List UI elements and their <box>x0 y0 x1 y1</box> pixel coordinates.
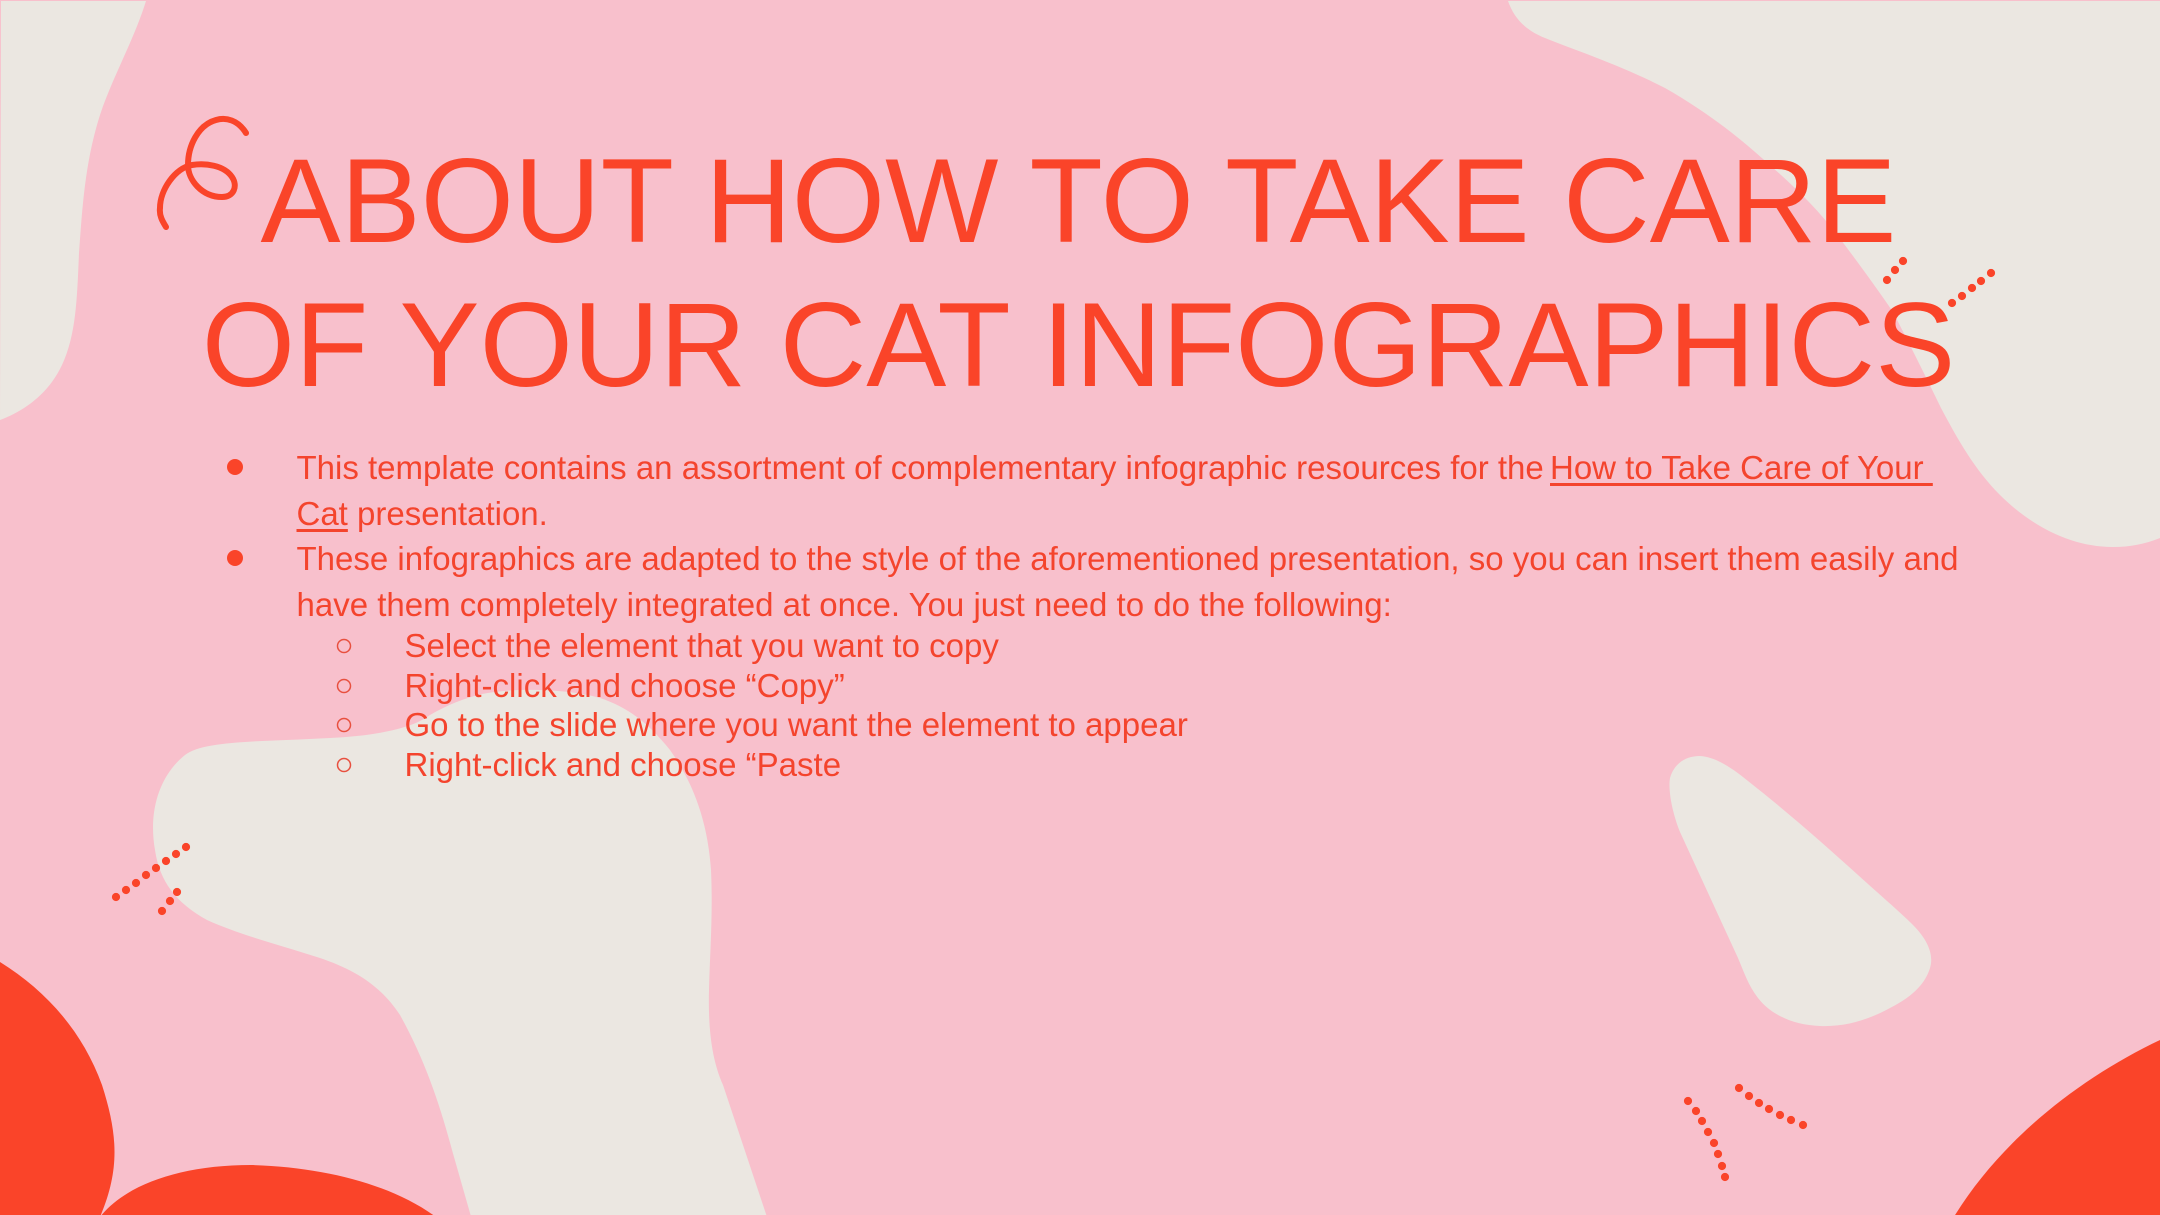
bullet list text: have them completely integrated at once. You just need to do the following: <box>296 586 1392 622</box>
blob: red bottom right <box>1952 1040 2160 1215</box>
blob: centre left bone shape <box>153 690 768 1215</box>
blob: red bottom left <box>0 962 440 1215</box>
title: ABOUT HOW TO TAKE CARE <box>261 134 1896 268</box>
dots: top right <box>1883 257 1995 307</box>
bullet list text: This template contains an assortment of complementary infographic resources for the <box>296 448 1544 486</box>
icon: curly squiggle <box>160 119 246 227</box>
bullet list text: Select the element that you want to copy <box>404 626 999 664</box>
bullet list text: Cat presentation. <box>296 494 548 532</box>
blob: right ear shape <box>1669 756 1931 1026</box>
bullet list text: Right-click and choose “Copy” <box>404 666 845 704</box>
title: OF YOUR CAT INFOGRAPHICS <box>202 278 1955 412</box>
bullet list text: Go to the slide where you want the element to appear <box>404 706 1188 742</box>
bullets <box>227 459 350 772</box>
dots: left <box>112 843 190 915</box>
blob: top left <box>0 1 146 420</box>
bullet list text: How to Take Care of Your <box>1550 448 1924 486</box>
blob: top right <box>1508 1 2160 547</box>
bullet list text: These infographics are adapted to the style of the aforementioned presentation, so you can insert them easily and <box>296 540 1959 576</box>
dots: bottom right <box>1684 1084 1807 1181</box>
bullet list text <box>296 448 1959 783</box>
bullet list text: Right-click and choose “Paste <box>404 746 841 782</box>
title <box>202 134 1955 412</box>
